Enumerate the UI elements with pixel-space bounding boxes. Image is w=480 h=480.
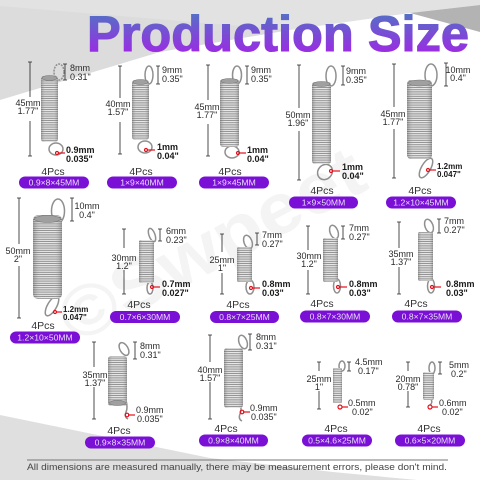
hook dimension: 7mm (262, 230, 282, 240)
size pill: 0.9×8×40MM (208, 436, 259, 446)
hook dimension: 10mm (74, 201, 100, 211)
wire diameter (240, 403, 278, 422)
length dimension: 35mm (388, 249, 414, 259)
hook dimension: 9mm (162, 65, 182, 75)
length dimension: 50mm (285, 110, 311, 120)
hook dimension (63, 63, 91, 82)
length dimension (197, 335, 223, 419)
wire diameter: 0.047" (437, 170, 461, 179)
spring 0.6×5×20MM (395, 360, 469, 446)
hook dimension: 0.27" (349, 232, 370, 242)
wire diameter: 0.03" (446, 288, 468, 298)
hook dimension: 0.23" (166, 235, 187, 245)
quantity: 4Pcs (310, 185, 334, 197)
length dimension: 40mm (197, 365, 223, 375)
length dimension: 45mm (194, 102, 220, 112)
size pill: 1×9×40MM (120, 178, 164, 188)
quantity: 4Pcs (408, 185, 432, 197)
coil (41, 64, 64, 155)
size pill: 0.9×8×45MM (29, 178, 79, 188)
coil (423, 362, 435, 405)
spring 0.7×6×30MM (110, 226, 191, 323)
length dimension: 1.2" (301, 259, 317, 269)
hook dimension: 0.35" (162, 74, 183, 84)
wire diameter: 1.2mm (437, 162, 462, 171)
length dimension: 0.78" (398, 382, 418, 392)
hook dimension: 0.31" (70, 72, 91, 82)
wire diameter (150, 279, 191, 298)
hook dimension: 0.4" (450, 73, 466, 83)
length dimension (5, 198, 31, 318)
length dimension: 1.57" (200, 373, 220, 383)
quantity: 4Pcs (310, 298, 334, 310)
wire diameter (250, 279, 291, 298)
quantity: 4Pcs (129, 166, 153, 178)
size pill: 0.5×4.6×25MM (308, 436, 366, 446)
hook dimension (70, 198, 100, 221)
coil (333, 361, 345, 403)
length dimension (380, 64, 406, 178)
hook dimension: 7mm (349, 223, 369, 233)
length dimension: 1.77" (383, 117, 403, 127)
size pill: 0.8×7×25MM (219, 312, 270, 322)
length dimension: 45mm (15, 98, 41, 108)
hook dimension: 10mm (445, 65, 471, 75)
coil (407, 64, 437, 180)
length dimension (194, 65, 220, 156)
coil (323, 224, 340, 293)
hook dimension (158, 226, 187, 245)
quantity: 4Pcs (404, 298, 428, 310)
hook dimension: 0.27" (444, 225, 465, 235)
length dimension: 20mm (395, 374, 421, 384)
spring 1.2×10×45MM (380, 63, 471, 208)
length dimension: 1.37" (391, 257, 411, 267)
wire diameter (125, 405, 164, 424)
length dimension: 1.37" (85, 378, 105, 388)
wire diameter: 1mm (247, 145, 268, 155)
hook dimension: 0.27" (262, 239, 283, 249)
size pill (289, 196, 358, 208)
hook dimension (437, 216, 465, 235)
hook dimension: 0.17" (358, 366, 379, 376)
coil (220, 66, 242, 158)
spring 1×9×45MM (194, 65, 272, 188)
quantity: 4Pcs (214, 423, 238, 435)
wire diameter: 0.5mm (348, 398, 376, 408)
coil (312, 66, 336, 183)
wire diameter: 0.02" (352, 407, 373, 417)
wire diameter (236, 145, 269, 164)
length dimension (82, 342, 108, 419)
spring 1.2×10×50MM (5, 198, 100, 344)
hook dimension (347, 357, 383, 376)
quantity: 4Pcs (31, 320, 55, 332)
length dimension (388, 222, 414, 294)
wire diameter: 0.03" (349, 288, 371, 298)
length dimension: 30mm (111, 253, 137, 263)
size pill: 0.6×5×20MM (405, 436, 455, 446)
length dimension: 40mm (105, 99, 131, 109)
length dimension: 25mm (306, 374, 332, 384)
hook dimension: 6mm (166, 226, 186, 236)
spring 0.9×8×40MM (197, 332, 278, 446)
wire diameter: 1mm (342, 162, 363, 172)
wire diameter (426, 162, 462, 179)
wire diameter (428, 398, 467, 417)
title: Production Size (87, 6, 469, 62)
spring 0.8×7×30MM (296, 223, 378, 322)
length dimension (285, 65, 311, 180)
hook dimension: 4.5mm (355, 357, 383, 367)
size pill: 1×9×45MM (212, 178, 256, 188)
spring 1×9×50MM (285, 65, 367, 208)
spring 0.5×4.6×25MM (302, 357, 383, 446)
hook dimension: 0.4" (79, 210, 95, 220)
length dimension: 50mm (5, 246, 31, 256)
length dimension: 1" (315, 382, 323, 392)
quantity: 4Pcs (417, 423, 441, 435)
spring 0.9×8×35MM (82, 341, 164, 448)
hook dimension: 9mm (346, 66, 366, 76)
watermark: ©Swpeet (45, 131, 378, 359)
coil (224, 334, 249, 421)
wire diameter: 0.8mm (446, 279, 475, 289)
length dimension: 45mm (380, 109, 406, 119)
wire diameter (336, 279, 378, 298)
coil (33, 199, 64, 318)
hook dimension: 0.31" (140, 350, 161, 360)
size pill: 0.9×8×35MM (95, 438, 145, 448)
hook dimension (444, 63, 471, 86)
hook dimension: 0.31" (256, 341, 277, 351)
spring 0.8×7×35MM (388, 216, 475, 322)
quantity: 4Pcs (226, 299, 250, 311)
hook dimension (438, 360, 469, 379)
spring 0.8×7×25MM (209, 230, 291, 323)
wire diameter (338, 398, 376, 417)
spring 0.9×8×45MM (15, 62, 95, 188)
size pill: 1×9×50MM (302, 198, 345, 208)
size pill: 0.8×7×30MM (310, 312, 360, 322)
length dimension (395, 362, 421, 407)
length dimension: 1.77" (197, 110, 217, 120)
wire diameter: 0.035" (66, 154, 93, 164)
wire diameter: 0.8mm (349, 279, 378, 289)
hook dimension: 5mm (449, 360, 469, 370)
coil (139, 227, 157, 294)
hook dimension (245, 65, 272, 84)
hook dimension: 8mm (70, 63, 90, 73)
wire diameter: 0.9mm (250, 403, 278, 413)
coil (418, 218, 435, 293)
wire diameter: 0.9mm (136, 405, 164, 415)
length dimension: 1.77" (18, 106, 38, 116)
hook dimension (248, 332, 277, 351)
wire diameter: 0.04" (157, 151, 179, 161)
quantity: 4Pcs (324, 423, 348, 435)
wire diameter: 0.035" (137, 414, 163, 424)
wire diameter: 0.02" (442, 407, 463, 417)
wire diameter: 1.2mm (63, 305, 88, 314)
length dimension (296, 226, 322, 294)
hook dimension: 9mm (251, 65, 271, 75)
length dimension: 30mm (296, 251, 322, 261)
wire diameter (56, 145, 95, 164)
wire diameter (430, 279, 475, 298)
length dimension (306, 362, 332, 409)
wire diameter (144, 142, 179, 161)
hook dimension: 0.35" (346, 75, 367, 85)
wire diameter: 0.6mm (439, 398, 467, 408)
size pill (386, 196, 456, 208)
hook dimension: 0.35" (251, 74, 272, 84)
coil (132, 66, 153, 153)
length dimension: 1" (218, 263, 226, 273)
hook dimension: 8mm (256, 332, 276, 342)
wire diameter: 0.8mm (262, 279, 291, 289)
wire diameter: 0.03" (262, 288, 284, 298)
hook dimension (156, 65, 183, 84)
size pill: 0.8×7×35MM (402, 312, 452, 322)
hook dimension (341, 66, 367, 85)
coil (237, 234, 254, 294)
wire diameter: 0.047" (63, 313, 87, 322)
quantity: 4Pcs (107, 425, 131, 437)
wire diameter: 1mm (157, 142, 178, 152)
wire diameter (54, 305, 88, 322)
quantity: 4Pcs (127, 299, 151, 311)
spring 1×9×40MM (105, 65, 183, 188)
size pill (10, 332, 80, 344)
size pill: 1.2×10×45MM (393, 198, 449, 208)
quantity: 4Pcs (41, 166, 65, 178)
hook dimension: 7mm (444, 216, 464, 226)
length dimension: 1.96" (288, 118, 308, 128)
quantity: 4Pcs (218, 166, 242, 178)
hook dimension: 0.2" (451, 369, 467, 379)
length dimension: 1.2" (116, 261, 132, 271)
length dimension: 2" (14, 254, 22, 264)
footer note: All dimensions are measured manually, there may be measurement errors, please don't mind. (27, 462, 447, 473)
wire diameter: 0.9mm (66, 145, 95, 155)
length dimension: 25mm (209, 255, 235, 265)
length dimension: 1.57" (108, 107, 128, 117)
length dimension (111, 229, 137, 294)
wire diameter: 0.04" (247, 154, 269, 164)
size pill: 0.7×6×30MM (120, 312, 170, 322)
wire diameter: 0.035" (251, 412, 277, 422)
wire diameter: 0.027" (162, 288, 189, 298)
hook dimension: 8mm (140, 341, 160, 351)
wire diameter (330, 162, 364, 181)
hook dimension (341, 223, 370, 242)
length dimension (15, 62, 41, 156)
length dimension (105, 66, 131, 154)
coil (108, 341, 131, 419)
hook dimension (255, 230, 283, 249)
hook dimension (133, 341, 161, 360)
length dimension (209, 234, 235, 294)
length dimension: 35mm (82, 370, 108, 380)
size pill: 1.2×10×50MM (17, 332, 73, 342)
wire diameter: 0.04" (342, 171, 364, 181)
wire diameter: 0.7mm (162, 279, 191, 289)
